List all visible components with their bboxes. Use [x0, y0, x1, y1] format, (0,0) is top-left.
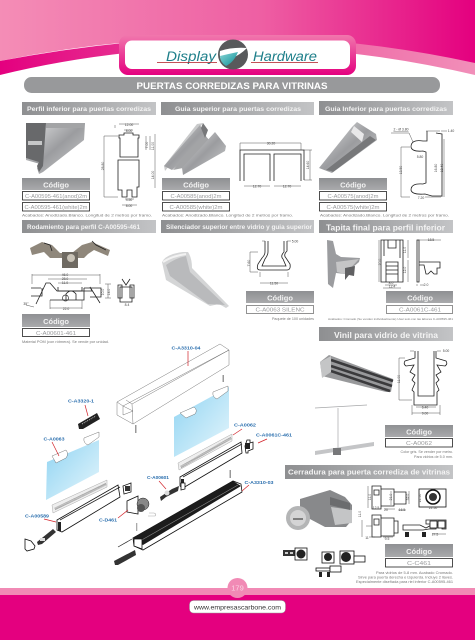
title bar	[24, 77, 440, 93]
end cap upper	[181, 483, 185, 490]
technical drawings: 27.5	[432, 532, 438, 536]
technical drawing: 7.20	[418, 196, 424, 200]
heading: Guia superior para puertas corredizas	[175, 106, 301, 113]
title bar: PUERTAS CORREDIZAS PARA VITRINAS	[136, 81, 328, 92]
caption: Acabados: Anodizado.Blanco. Longitud de 2 metros por tramo.	[320, 214, 449, 218]
part labels: C-A0063	[44, 436, 65, 442]
caption: Acabados: Anodizado.Blanco. Longitud de 2 metros por tramo.	[162, 214, 293, 218]
glass panel left	[46, 432, 99, 500]
exploded assembly diagram	[25, 344, 293, 565]
lock icons	[283, 548, 365, 577]
product photo	[30, 241, 110, 268]
heading: Cerradura para puerta corrediza de vitrinas	[288, 468, 450, 476]
technical drawing: front: 12.4	[389, 284, 395, 288]
footer band	[0, 578, 475, 640]
caption	[401, 450, 453, 459]
technical drawing: 11.0	[62, 281, 68, 285]
roller C-A00601	[160, 486, 179, 501]
logo text: Hardware: Hardware	[253, 49, 317, 64]
website pill	[190, 600, 286, 613]
logo text: Display: Display	[166, 49, 217, 64]
lower profile left	[57, 485, 120, 532]
part labels: C-A0062	[234, 422, 257, 428]
technical drawing	[240, 142, 312, 188]
vinyl strip left	[52, 480, 107, 513]
technical drawing: 10.0	[101, 289, 105, 295]
technical drawings: 16.5	[399, 508, 405, 512]
panel: vinil	[315, 327, 453, 459]
technical drawing: front: 12.0	[403, 267, 407, 273]
technical drawing: 12.70	[283, 184, 291, 188]
technical drawing: 11.50	[270, 282, 278, 286]
part labels: C-A00589	[25, 514, 49, 518]
technical drawing: 18.40	[440, 164, 444, 172]
technical drawing: front: 20.0	[378, 259, 382, 265]
technical drawing: 28.0	[62, 277, 68, 281]
technical drawing: 5.80	[417, 155, 423, 159]
technical drawing: 8.00	[126, 129, 132, 133]
heading: Guia Inferior para puertas corredizas	[325, 106, 447, 113]
heading: Tapita final para perfil inferior	[326, 224, 445, 232]
technical drawings: 21.0	[389, 494, 393, 500]
technical drawing	[397, 349, 449, 416]
part labels: C-D461	[99, 518, 117, 522]
technical drawing	[247, 240, 298, 286]
technical drawing: 28.80	[101, 162, 105, 170]
heading: Silenciador superior entre vidrio y guia superior	[166, 224, 313, 231]
end cap left	[25, 539, 35, 551]
heading: Rodamiento para perfil C-A00595-461	[27, 224, 140, 231]
technical drawing: front	[378, 240, 408, 288]
code table: Código	[407, 294, 433, 302]
technical drawing: 30.20	[267, 142, 275, 146]
panel: guia inferior	[319, 101, 454, 218]
code table: C-A00585(white)2m	[170, 205, 223, 211]
caption	[356, 571, 453, 584]
technical drawing: 11.00	[151, 142, 155, 150]
technical drawing: front: 8.0	[389, 281, 393, 285]
code table: C-C461	[407, 561, 431, 567]
technical drawing: 7.00	[145, 142, 149, 148]
caption: Material POM (con rótmera). Se vende por unidad.	[22, 340, 109, 344]
technical drawings: 11.0	[368, 494, 372, 500]
technical drawings: 32.0	[406, 494, 410, 500]
part labels: C-A3310-03	[244, 480, 274, 485]
heading	[161, 220, 314, 233]
logo badge	[119, 35, 356, 75]
page number: 179	[231, 584, 244, 592]
technical drawing: 7.60	[247, 260, 251, 266]
caption: Acabados: Anodizado.Blanco. Longitud de 2 metros por tramo.	[22, 214, 152, 218]
product photo	[164, 123, 226, 175]
caption: Para vidrios de 5-8 mm. Acabado Cromado.	[376, 571, 453, 575]
end cap center	[123, 483, 131, 494]
technical drawing: 8.00	[126, 204, 132, 208]
code table: C-A00585(anod)2m	[170, 194, 222, 200]
panel: silenciador	[161, 220, 314, 321]
code table: C-A0063 SILENC	[256, 308, 305, 314]
caption: Paquete de 100 unidades	[272, 317, 314, 321]
technical drawing: 14.0	[107, 289, 111, 295]
product photo	[162, 252, 229, 308]
technical drawing	[101, 123, 155, 208]
end cap right	[245, 440, 253, 453]
technical drawing: 14.00	[151, 171, 155, 179]
code table	[22, 178, 90, 211]
code table: C-A0061C-461	[399, 308, 441, 314]
part labels: C-A3310-04	[172, 346, 201, 350]
code table	[162, 178, 230, 211]
roller left	[37, 529, 56, 545]
technical drawing: 12.00	[125, 123, 133, 127]
heading	[285, 465, 453, 479]
side view drawing: 8.4	[125, 303, 129, 307]
caption: Especialmente diseñada para riel inferior C-A00595-461	[356, 580, 453, 584]
top rail	[117, 344, 229, 433]
panel: perfil inferior	[22, 102, 156, 218]
technical drawing: 5.00	[443, 349, 449, 353]
caption: Acabados: Cromado (Se venden individualmente) Usar solo con las labores C-A00595-461	[328, 317, 453, 321]
technical drawing: 16.80	[434, 164, 438, 172]
header banner	[0, 0, 475, 75]
technical drawing: 46.0	[62, 273, 68, 277]
technical drawing: 5.00	[292, 240, 298, 244]
panel: guia superior	[161, 102, 314, 218]
code table: Código	[340, 180, 366, 190]
code table	[22, 314, 90, 337]
technical drawing: 12.70	[253, 184, 261, 188]
code table	[246, 291, 314, 314]
technical drawing	[391, 128, 454, 200]
technical drawing: 2 - Ø 3.80	[393, 128, 409, 132]
page number	[228, 578, 248, 598]
logo emblem	[218, 40, 248, 70]
code table	[386, 291, 453, 314]
panel: cerradura	[283, 465, 453, 584]
code table: C-A00595-461(anod)2m	[25, 194, 88, 200]
technical drawing: 35°	[23, 302, 29, 306]
installation photo	[315, 405, 374, 455]
caption: Para vidrios de 5.0 mm.	[414, 455, 453, 459]
panel: rodamiento	[22, 220, 156, 344]
part labels: C-A3320-1	[68, 398, 95, 404]
code table: C-A00595-461(white)2m	[24, 205, 88, 211]
technical drawing: 11.00	[397, 375, 401, 383]
technical drawing: side	[416, 238, 441, 287]
heading: Vinil para vidrio de vitrina	[334, 330, 438, 340]
lock part	[127, 496, 156, 531]
technical drawings: 9.5	[385, 537, 389, 541]
code table: Código	[267, 294, 293, 302]
lower profile right	[180, 442, 242, 488]
big lower rail	[118, 470, 242, 550]
roller C-A3320-1	[78, 413, 100, 429]
technical drawing: 4.50	[126, 198, 132, 202]
technical drawing: side: 2.0	[424, 283, 428, 287]
caption: Color gris. Se vender por metro.	[401, 450, 453, 454]
code table: Código	[406, 547, 432, 556]
technical drawings: 20	[384, 508, 388, 512]
product photo	[327, 240, 360, 288]
technical drawing: 9.00	[422, 412, 428, 416]
technical drawing: 14.60	[306, 161, 310, 169]
code table: Código	[43, 317, 69, 326]
glass panel right	[174, 386, 229, 457]
part labels: C-A0061C-461	[256, 432, 293, 438]
technical drawings: 21.50	[418, 494, 422, 502]
code table	[385, 544, 453, 567]
technical drawings: 22.50	[429, 506, 437, 510]
lock photo	[286, 490, 352, 530]
code table: Código	[183, 180, 209, 190]
heading: Perfil inferior para puertas corredizas	[27, 106, 151, 113]
code table: Código	[43, 180, 69, 190]
code table: Código	[406, 428, 432, 436]
technical drawing: side: 18.5	[428, 238, 434, 242]
website pill: www.empresascarbone.com	[193, 604, 281, 612]
product photo	[26, 123, 85, 174]
part labels	[25, 346, 293, 522]
code table: C-A00575(white)2m	[326, 205, 380, 211]
code table: C-A0062	[406, 441, 432, 447]
vinyl strip right	[178, 434, 232, 470]
caption: Sirve para puerta derecha e izquierda. Incluye 2 llaves.	[358, 576, 453, 580]
product photo	[320, 355, 393, 392]
technical drawing: 6.40	[422, 406, 428, 410]
code table: C-A00601-461	[36, 331, 76, 337]
panel: tapita final	[319, 220, 453, 321]
technical drawing: front: 11.0	[403, 247, 407, 253]
technical drawing: 1.40	[448, 129, 454, 133]
technical drawing	[23, 273, 111, 311]
technical drawings: 12.5	[373, 506, 379, 510]
roller bottom	[114, 550, 136, 565]
code table	[319, 178, 387, 211]
heading	[161, 102, 314, 115]
technical drawing: 22.0	[63, 307, 69, 311]
technical drawings: 11.0	[358, 511, 362, 517]
technical drawings	[358, 486, 446, 541]
part labels: C-A00601	[147, 475, 169, 480]
code table: C-A00575(anod)2m	[328, 194, 379, 200]
code table	[385, 425, 453, 447]
technical drawings: 11	[365, 536, 369, 540]
technical drawing: 13.50	[399, 166, 403, 174]
product photo	[319, 122, 377, 173]
